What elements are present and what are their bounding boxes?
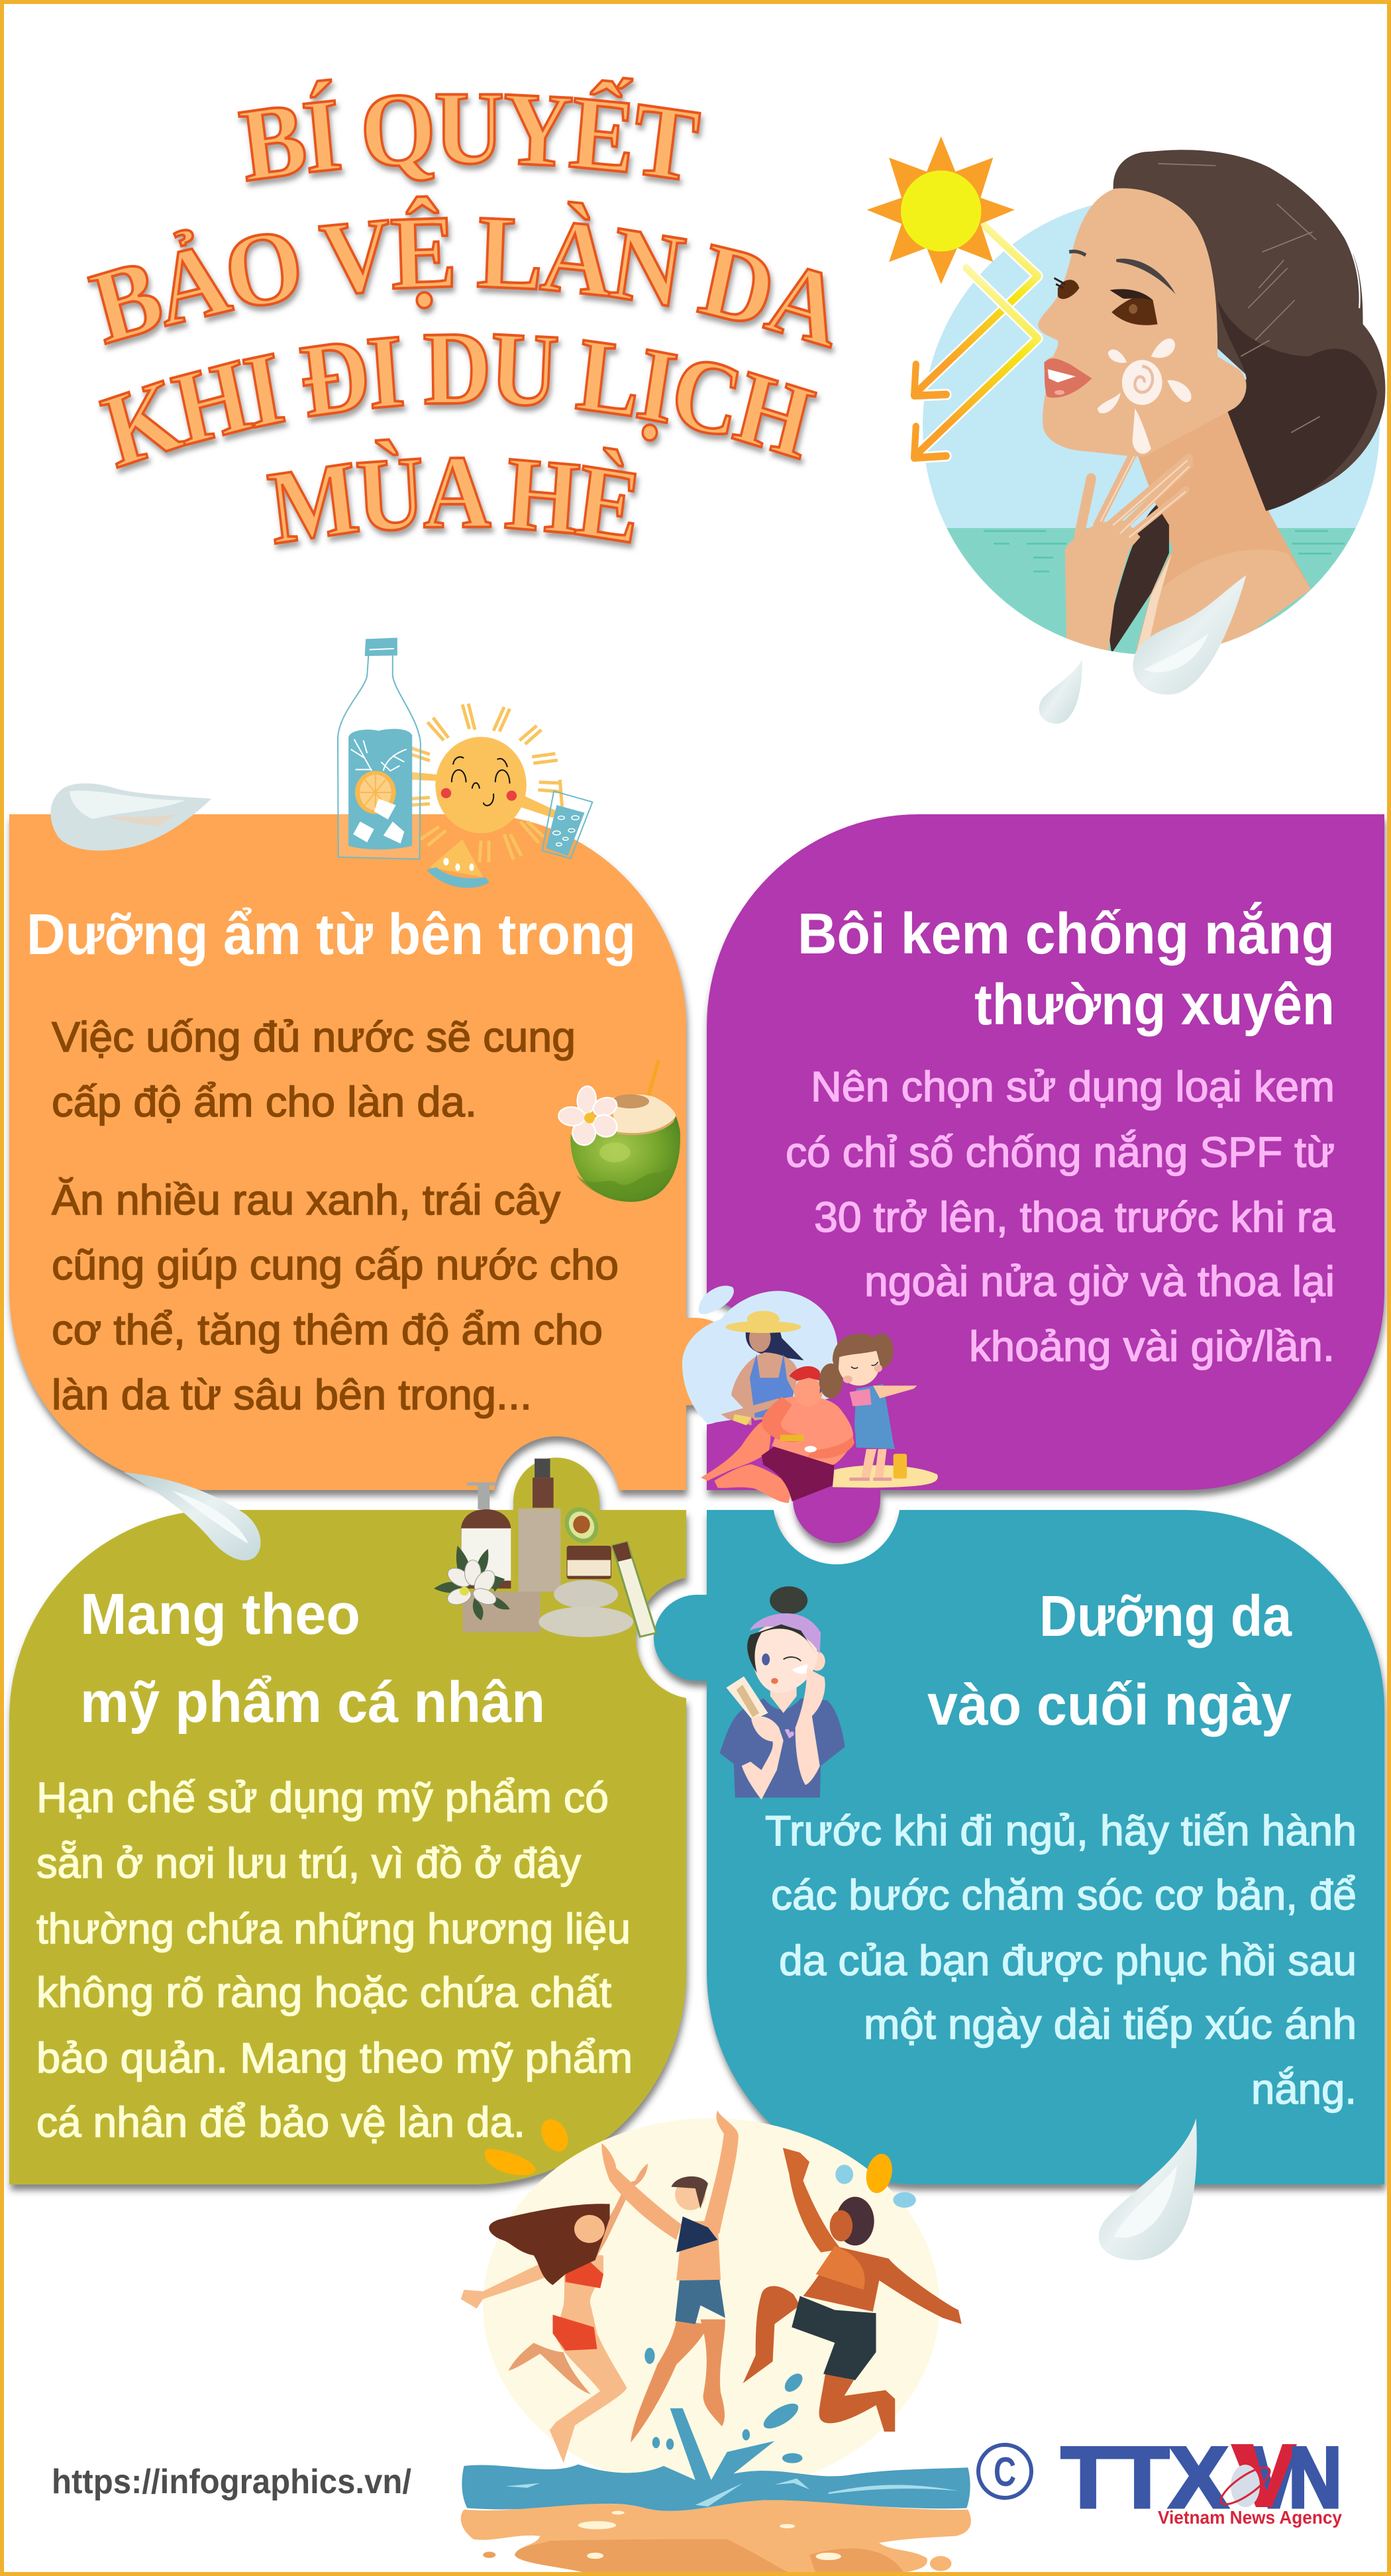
pills and drops [485,2118,916,2208]
panel: teal - night care: vào cuối ngày [927,1673,1292,1737]
body text olive: Hạn chế sử dụng mỹ phẩm có [36,1774,609,1821]
panel: orange - hydrate [9,814,739,1490]
illustration: water bottle and happy sun [338,638,592,888]
title [86,77,837,553]
woman jumping [461,2163,648,2463]
sand [833,1465,938,1487]
logo: TTXVN: Vietnam News Agency [1158,2507,1342,2528]
icon: coconut drink [558,1060,680,1202]
splash water [462,2408,970,2511]
illustration: friends jumping on beach [461,2110,971,2573]
panel: purple - sunscreen: thường xuyên [974,973,1335,1037]
bottle [338,655,421,859]
backdrop [483,2118,939,2493]
sun character [411,704,560,862]
panel: teal - night care [654,1510,1384,2184]
body text orange: Ăn nhiều rau xanh, trái cây [52,1176,560,1224]
cream drop large [1133,575,1246,694]
body text orange [52,1013,619,1419]
sand [461,2500,971,2573]
body text orange: cấp độ ẩm cho làn da. [52,1078,477,1126]
sky blob [682,1291,838,1424]
body text purple: khoảng vài giờ/lần. [969,1322,1335,1370]
icon: cream blob near orange panel [123,1472,260,1560]
body text teal: nắng. [1251,2065,1357,2113]
body text olive [36,1774,633,2146]
sun [867,136,1015,284]
body text orange: làn da từ sâu bên trong... [52,1371,532,1419]
body text purple: Nên chọn sử dụng loại kem [811,1063,1335,1110]
heading orange: Dưỡng ẩm từ bên trong [26,902,636,967]
illustration: girl applying skincare [720,1586,845,1799]
icon: cream drop bottom-right [1099,2118,1197,2260]
body text olive: không rõ ràng hoặc chứa chất [36,1968,611,2016]
body text olive: cá nhân để bảo vệ làn da. [36,2098,525,2146]
heading purple: Bôi kem chống nắng [798,902,1335,966]
father [701,1366,854,1503]
body text olive: sẵn ở nơi lưu trú, vì đồ ở đây [36,1839,581,1887]
title: BẢO VỆ LÀN DA [86,195,837,356]
body text purple [786,1063,1335,1370]
copyright mark [978,2445,1031,2498]
panel: olive - personal cosmetics: mỹ phẩm cá nhân [80,1670,545,1735]
heading teal: Dưỡng da [1039,1584,1292,1648]
panel: olive - personal cosmetics [9,1458,686,2184]
panel: purple - sunscreen [707,814,1384,1543]
logo: TTXVN [1061,2429,1342,2528]
body text purple: 30 trở lên, thoa trước khi ra [814,1193,1335,1241]
illustration: woman applying sunscreen [861,136,1391,727]
mother [721,1311,804,1425]
logo: TTXVN: TTX [1061,2429,1228,2526]
body text purple: có chỉ số chống nắng SPF từ [786,1128,1335,1176]
watermelon [430,839,484,877]
body text teal: các bước chăm sóc cơ bản, để [771,1871,1357,1919]
logo: TTXVN: V [1251,2429,1297,2526]
cream drop small [1039,659,1082,724]
cream swirl on cheek [1097,339,1192,454]
face [1038,188,1246,456]
body text purple: ngoài nửa giờ và thoa lại [864,1258,1335,1305]
sun rays reflected [914,224,1038,396]
middle woman jumping [601,2110,739,2443]
man jumping [743,2148,962,2432]
title: MÙA HÈ [265,438,641,553]
glass [560,780,562,809]
source url: https://infographics.vn/ [52,2463,411,2501]
logo: TTXVN: N [1288,2429,1342,2526]
icon: cream blob top-left [50,783,211,851]
body text olive: bảo quản. Mang theo mỹ phẩm [36,2034,633,2082]
body text orange: cơ thể, tăng thêm độ ẩm cho [52,1306,603,1354]
title: KHI ĐI DU LỊCH [98,333,822,476]
body text orange: Việc uống đủ nước sẽ cung [52,1013,576,1061]
body text teal: da của bạn được phục hồi sau [779,1937,1357,1984]
daughter [819,1333,917,1481]
hair [1113,150,1385,511]
heading olive: Mang theo [80,1582,360,1646]
illustration: family applying sunscreen [682,1286,938,1503]
title: BÍ QUYẾT [237,77,706,189]
body text teal [765,1807,1357,2113]
copyright mark: C [994,2449,1016,2495]
body text teal: một ngày dài tiếp xúc ánh [864,2000,1357,2048]
body text teal: Trước khi đi ngủ, hãy tiến hành [765,1807,1357,1854]
illustration: cosmetics and avocado [434,1458,656,1637]
body text orange: cũng giúp cung cấp nước cho [52,1241,619,1289]
body text olive: thường chứa những hương liệu [36,1905,631,1953]
